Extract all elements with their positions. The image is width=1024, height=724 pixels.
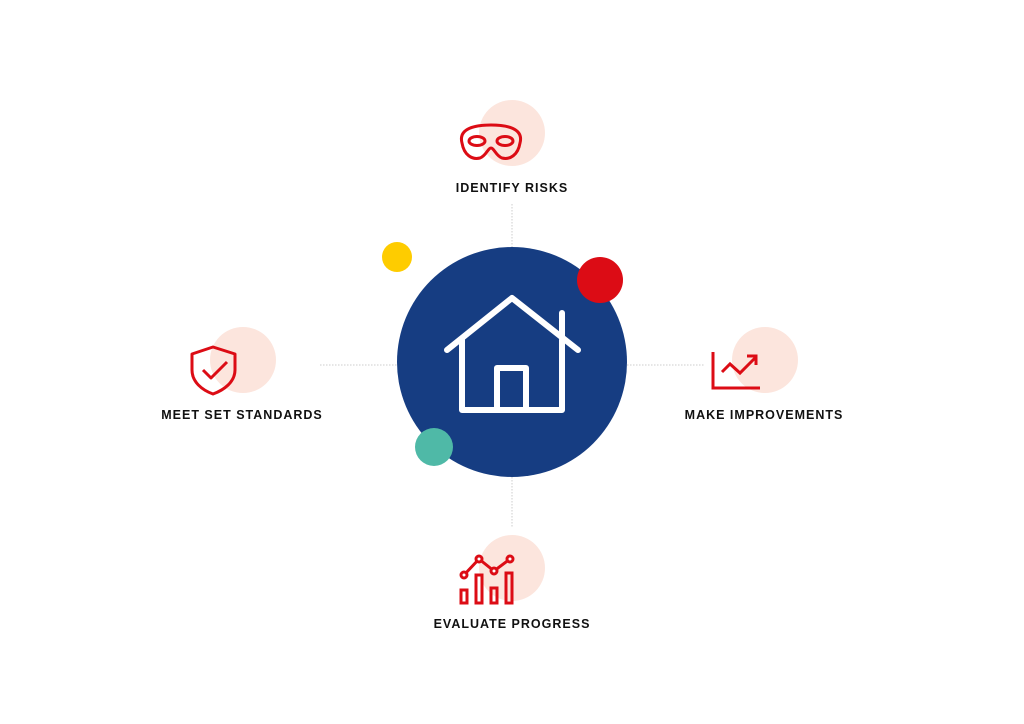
item: meet set standards: MEET SET STANDARDS [161, 408, 323, 422]
icon: growth chart [713, 352, 760, 388]
decorative dot: yellow [382, 242, 412, 272]
icon: mask [461, 125, 521, 158]
center circle: home [397, 247, 627, 477]
item: make improvements: MAKE IMPROVEMENTS [685, 408, 843, 422]
item: make improvements [685, 327, 843, 422]
decorative dot: teal [415, 428, 453, 466]
icon: shield check [192, 347, 235, 394]
item: evaluate progress [434, 535, 590, 631]
icon: house [447, 298, 578, 410]
item: identify risks [456, 100, 568, 195]
icon: bar chart with line [461, 556, 513, 603]
item: identify risks: IDENTIFY RISKS [456, 181, 568, 195]
item: meet set standards [161, 327, 323, 422]
decorative dot: red [577, 257, 623, 303]
item: evaluate progress: EVALUATE PROGRESS [434, 617, 590, 631]
